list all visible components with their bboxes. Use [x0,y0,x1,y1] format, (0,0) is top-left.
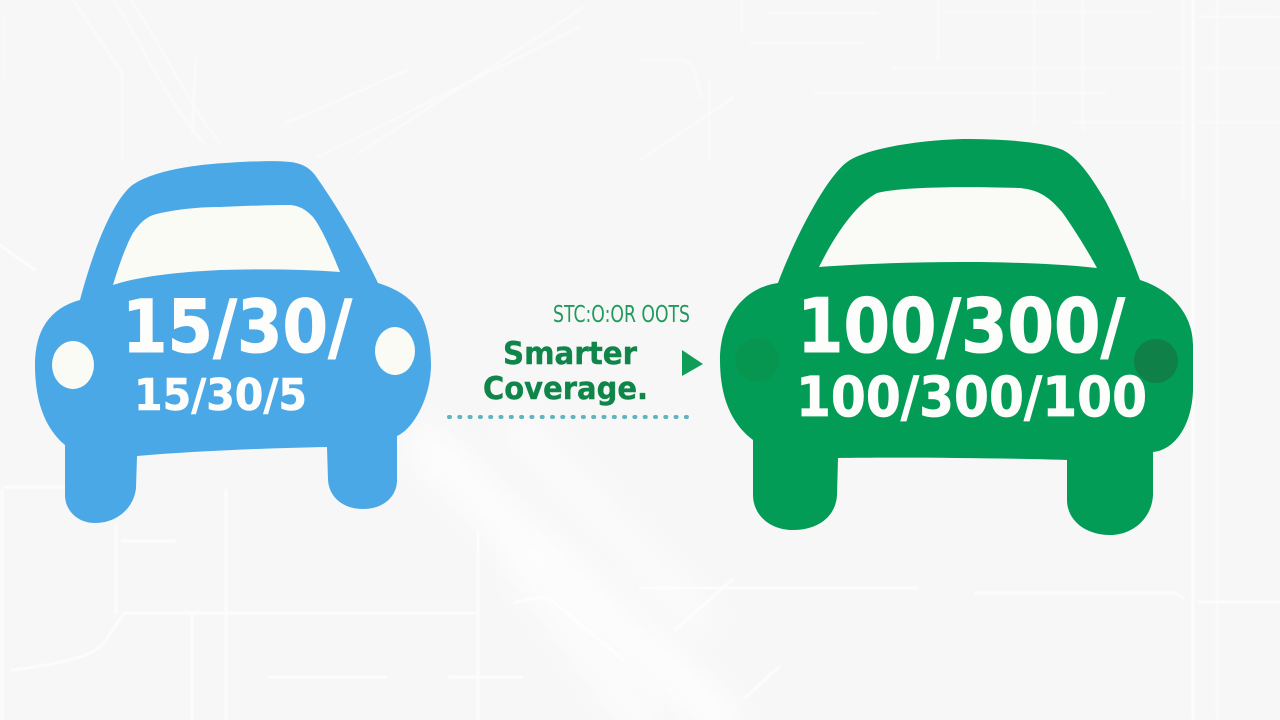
heading: smarter coverage: Coverage. [483,371,648,407]
right headlight [375,327,415,375]
car: higher coverage, green [720,139,1193,535]
left lamp [735,338,779,382]
car: basic coverage, blue [35,161,431,523]
large coverage figure: 15/30/ [122,285,352,370]
windshield [819,187,1097,268]
dotted line [449,415,689,419]
heading: smarter coverage: Smarter [503,336,638,372]
small caption: STC:O:OR OOTS [553,302,690,328]
large coverage figure: 100/300/ [797,282,1126,370]
small coverage figure: 100/300/100 [796,365,1147,429]
transition label with arrow [449,302,703,417]
left headlight [52,341,94,389]
windshield [113,205,340,285]
small coverage figure: 15/30/5 [134,370,307,421]
arrow [682,350,703,376]
right lamp [1134,339,1178,383]
